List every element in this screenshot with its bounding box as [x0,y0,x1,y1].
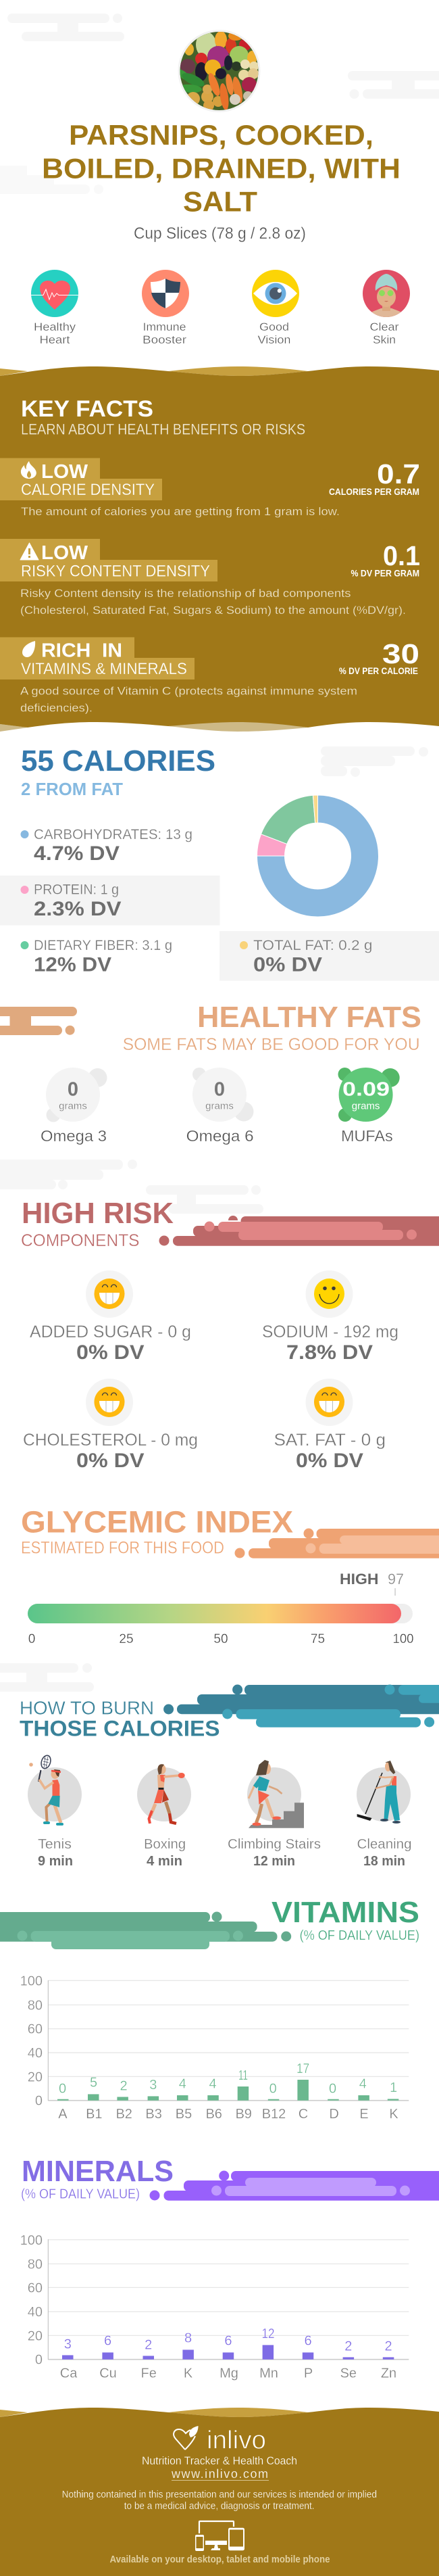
health benefit: clear skin [363,270,410,346]
risk: sodium: 7.8% DV [286,1341,373,1364]
gauge scale [28,1632,413,1646]
footer tagline: Nutrition Tracker & Health Coach [142,2454,297,2467]
health benefit: good vision: Vision [258,333,290,346]
risk: added sugar: 0% DV [76,1341,145,1364]
activity: cleaning: Cleaning [357,1837,412,1852]
icon: flame [21,461,36,479]
title [42,119,401,218]
bar chart: vitamins: 5 [90,2076,97,2091]
activity: climbing stairs: 12 min [253,1854,295,1869]
bar chart: minerals: 80 [28,2257,43,2272]
activity: cleaning: 18 min [363,1854,405,1869]
fact: rich in vitamins and minerals [0,637,419,714]
fact: low risky content density [0,539,420,617]
bar chart: minerals: 12 [262,2327,274,2341]
bar chart: vitamins: 0 [269,2082,277,2097]
fact: low risky content density: % DV PER GRAM [351,568,419,579]
title: BOILED, DRAINED, WITH [42,153,401,184]
macro: protein [0,876,220,926]
fact: rich in vitamins and minerals: % DV PER CALORIE [339,665,418,676]
glycemic index value: 97 [388,1571,404,1588]
fat: omega 6: Omega 6 [186,1127,254,1145]
heading: minerals: MINERALS [22,2155,174,2188]
bar chart: minerals: Cu [99,2366,117,2381]
heading: high risk [21,1197,174,1250]
heading: healthy fats: HEALTHY FATS [197,1001,421,1034]
gauge scale: 25 [119,1632,134,1646]
bar chart: vitamins: B6 [205,2107,222,2122]
activity: boxing: Boxing [144,1837,186,1852]
icon: warning triangle [20,543,38,560]
macro: carbohydrates [20,827,192,865]
fact: low risky content density: RISKY CONTENT DENSITY [21,563,210,580]
activity: climbing stairs: Climbing Stairs [228,1837,321,1852]
bar chart: minerals: 6 [224,2334,232,2349]
bar chart: minerals: 3 [64,2337,72,2352]
macro: dietary fiber: 12% DV [34,954,111,976]
decoration: vitamins band [0,1912,291,1949]
bar chart: minerals: Mn [259,2366,278,2381]
heading: 55 calories [21,744,215,799]
disclaimer: to be a medical advice, diagnosis or treatment. [124,2500,315,2512]
key facts heading: KEY FACTS [21,396,153,422]
glycemic index value [340,1571,404,1596]
bar chart: vitamins [20,1974,409,2122]
heading: 55 calories: 55 CALORIES [21,744,215,778]
macro: total fat [220,931,439,981]
donut chart [257,795,378,917]
health benefit: healthy heart [31,270,78,346]
bar chart: minerals: 0 [35,2353,43,2368]
fat: omega 3: Omega 3 [41,1127,107,1145]
activity: cleaning [357,1761,412,1869]
bar chart: minerals: 60 [28,2281,43,2295]
health benefit: healthy heart: Healthy [34,320,76,333]
logo: inlivo: inlivo [207,2427,266,2455]
gauge scale: 50 [213,1632,228,1646]
risk: saturated fat [274,1379,386,1472]
fact: low risky content density: Risky Content density is the relationship of bad components [20,587,351,600]
bar chart: minerals: 100 [20,2233,43,2248]
available on devices note: Available on your desktop, tablet and mobile phone [109,2554,330,2565]
bar chart: vitamins: 11 [238,2068,248,2083]
macro: dietary fiber [20,938,172,976]
decoration: glycemic band [235,1528,439,1558]
risk: cholesterol [23,1379,198,1472]
bar chart: minerals: Mg [220,2366,238,2381]
heading: glycemic index: GLYCEMIC INDEX [21,1505,293,1540]
decoration: healthy fats band [0,1007,77,1035]
bar chart: vitamins: 17 [296,2061,309,2076]
bar chart: vitamins: A [58,2107,68,2122]
bar chart: vitamins: B12 [262,2107,286,2122]
heading: healthy fats: SOME FATS MAY BE GOOD FOR YOU [123,1035,420,1054]
health benefit: clear skin: Skin [373,333,396,346]
bar chart: minerals [20,2233,409,2381]
bar chart: vitamins: E [359,2107,369,2122]
footer tagline: www.inlivo.com [171,2467,268,2481]
logo: inlivo [174,2426,266,2455]
fact: low risky content density: 0.1 [383,540,420,571]
icon: grin face [314,1387,344,1417]
bar chart: vitamins: 0 [35,2094,43,2109]
heading: vitamins: (% OF DAILY VALUE) [300,1928,419,1943]
fat: omega 6: 0 [214,1079,225,1101]
fact: rich in vitamins and minerals: A good source of Vitamin C (protects against immune system [20,684,357,698]
heading: glycemic index: ESTIMATED FOR THIS FOOD [21,1539,224,1558]
bar chart: vitamins: 0 [59,2082,66,2097]
gauge scale: 75 [311,1632,325,1646]
macro: total fat: 0% DV [253,954,322,976]
icon: smile face [314,1279,344,1309]
background cloud decorations [0,14,439,1692]
bar chart: minerals: 6 [304,2334,312,2349]
heading: minerals: (% OF DAILY VALUE) [21,2187,140,2202]
activity: boxing [137,1764,191,1869]
icon: devices [195,2521,244,2551]
decoration: high risk band [159,1216,439,1246]
fact: rich in vitamins and minerals: deficiencies). [20,702,93,714]
heading: healthy fats [123,1001,421,1054]
fact: rich in vitamins and minerals: RICH IN [41,640,122,661]
macro: dietary fiber: DIETARY FIBER: 3.1 g [34,938,172,953]
food photo [178,30,261,112]
icon: grin face [95,1387,124,1417]
macro: carbohydrates: 4.7% DV [34,842,120,865]
fact: low calorie density: 0.7 [377,458,420,490]
fact: low calorie density: LOW [41,461,88,483]
panel: footer [0,2408,439,2576]
gauge scale: 0 [28,1632,35,1646]
health benefit: good vision: Good [259,320,289,333]
macro: protein: PROTEIN: 1 g [34,882,119,898]
icon: woman on stairs [249,1760,304,1828]
bar chart: minerals: Fe [141,2366,157,2381]
disclaimer: Nothing contained in this presentation and our services is intended or implied [62,2489,377,2500]
heading: minerals [21,2155,174,2202]
heading: how to burn those calories [20,1698,220,1741]
bar chart: vitamins: 4 [179,2076,186,2091]
heading: high risk: HIGH RISK [22,1197,174,1230]
icon: tennis player [29,1754,63,1826]
fact: low risky content density: (Cholesterol, Saturated Fat, Sugars & Sodium) to the amount (%DV/gr). [20,604,406,617]
key facts heading [21,396,305,438]
key facts heading: LEARN ABOUT HEALTH BENEFITS OR RISKS [21,421,305,438]
macro: total fat: TOTAL FAT: 0.2 g [253,938,373,953]
fact: rich in vitamins and minerals: 30 [382,638,419,669]
fat: omega 3: grams [59,1101,87,1112]
icon: grin face [95,1279,124,1309]
bar chart: minerals: 2 [145,2337,152,2352]
macro: carbohydrates: CARBOHYDRATES: 13 g [34,827,192,842]
bar chart: vitamins: C [299,2107,308,2122]
bar chart: minerals: Zn [381,2366,396,2381]
bar chart: vitamins: 0 [329,2082,336,2097]
bar chart: minerals: P [304,2366,313,2381]
activity: tennis [28,1754,82,1869]
fat: omega 3 [41,1068,107,1145]
title: SALT [183,185,257,218]
panel: key facts [0,366,439,732]
title: PARSNIPS, COOKED, [69,119,373,151]
bar chart: minerals: 40 [28,2305,43,2320]
bar chart: vitamins: 80 [28,1998,43,2013]
glycemic gauge bar [28,1604,413,1623]
fat: omega 6 [186,1068,254,1145]
bar chart: minerals: 2 [384,2339,392,2354]
bar chart: vitamins: K [389,2107,398,2122]
fact: low calorie density: CALORIES PER GRAM [329,486,419,497]
risk: cholesterol: 0% DV [76,1450,145,1472]
bar chart: vitamins: 1 [390,2080,397,2095]
bar chart: vitamins: B5 [176,2107,192,2122]
bar chart: minerals: 6 [104,2334,111,2349]
macro: protein: 2.3% DV [34,898,122,920]
fact: low calorie density: The amount of calories you are getting from 1 gram is low. [21,505,340,518]
bar chart: minerals: Se [340,2366,357,2381]
fact: low calorie density [0,458,420,518]
risk: added sugar: ADDED SUGAR - 0 g [30,1322,191,1341]
glycemic index value: HIGH [340,1571,378,1588]
fact: low risky content density: LOW [41,542,88,564]
activity: boxing: 4 min [147,1854,182,1869]
serving size subtitle: Cup Slices (78 g / 2.8 oz) [134,224,306,243]
risk: sodium: SODIUM - 192 mg [262,1322,398,1341]
bar chart: vitamins: 3 [149,2078,157,2093]
risk: sodium [262,1270,398,1364]
heading: how to burn those calories: HOW TO BURN [20,1698,154,1719]
risk: saturated fat: SAT. FAT - 0 g [274,1431,386,1450]
risk: added sugar [30,1270,191,1364]
bar chart: vitamins: 40 [28,2046,43,2061]
decoration: burn calories band [163,1685,439,1727]
footer tagline [142,2454,297,2481]
health benefit: healthy heart: Heart [39,333,70,346]
gauge scale: 100 [393,1632,413,1646]
fat: MUFAs: 0.09 [342,1079,390,1101]
bar chart: minerals: 20 [28,2329,43,2343]
heading: vitamins: VITAMINS [272,1896,419,1929]
health benefit: good vision [252,270,299,346]
health benefit: immune booster: Booster [143,333,186,346]
icon: leaf [22,641,35,657]
health benefit: clear skin: Clear [370,320,399,333]
bar chart: vitamins: 60 [28,2022,43,2037]
bar chart: minerals: 2 [344,2339,352,2354]
bar chart: vitamins: 4 [209,2076,217,2091]
heading: glycemic index [21,1505,293,1558]
heading: vitamins [272,1896,419,1943]
fat: MUFAs: MUFAs [341,1127,393,1145]
activity: climbing stairs [228,1760,321,1869]
bar chart: vitamins: B1 [86,2107,103,2122]
heading: 55 calories: 2 FROM FAT [21,779,123,799]
icon: woman sweeping [357,1761,401,1823]
bar chart: minerals: 8 [184,2331,192,2346]
bar chart: vitamins: B2 [115,2107,132,2122]
health benefit: immune booster [142,270,189,346]
bar chart: vitamins: 4 [359,2076,367,2091]
fat: omega 3: 0 [68,1079,78,1101]
fat: omega 6: grams [205,1101,234,1112]
fact: rich in vitamins and minerals: VITAMINS & MINERALS [21,660,187,678]
fat: MUFAs [338,1068,400,1145]
heading: high risk: COMPONENTS [21,1231,139,1250]
fact: low calorie density: CALORIE DENSITY [21,481,155,499]
bar chart: vitamins: B9 [235,2107,252,2122]
disclaimer [62,2489,377,2512]
decoration: minerals band [150,2170,439,2201]
bar chart: vitamins: B3 [145,2107,162,2122]
activity: tennis: 9 min [38,1854,73,1869]
bar chart: vitamins: 100 [20,1974,43,1989]
risk: cholesterol: CHOLESTEROL - 0 mg [23,1431,198,1450]
bar chart: vitamins: D [329,2107,339,2122]
heading: how to burn those calories: THOSE CALORIES [20,1717,220,1741]
risk: saturated fat: 0% DV [296,1450,363,1472]
bar chart: minerals: K [184,2366,193,2381]
health benefit: immune booster: Immune [143,320,186,333]
icon: boxer [149,1764,185,1823]
activity: tennis: Tenis [38,1837,72,1852]
bar chart: minerals: Ca [60,2366,78,2381]
fat: MUFAs: grams [352,1101,380,1112]
bar chart: vitamins: 2 [120,2078,128,2093]
bar chart: vitamins: 20 [28,2070,43,2084]
